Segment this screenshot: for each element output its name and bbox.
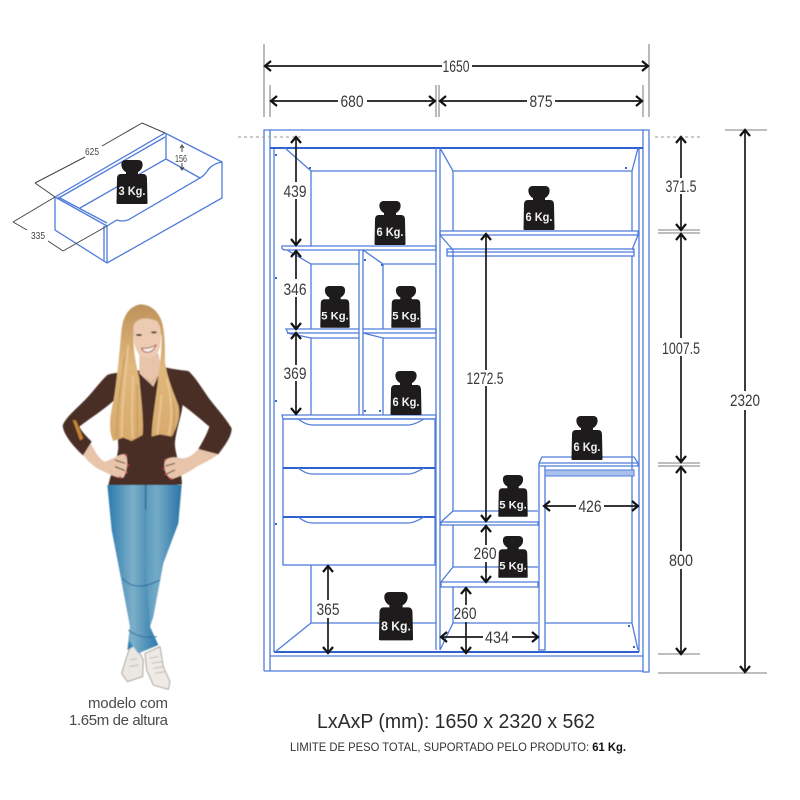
dimension: 369 height: 369 (284, 364, 306, 383)
panel: drawer detail (13, 123, 222, 263)
weight: 5 Kg left niche: 5 Kg. (321, 310, 349, 322)
hair, face, sweater and arms (63, 304, 232, 487)
dimension: right side heights (658, 130, 767, 673)
drawer label: 156: 156 (175, 153, 187, 165)
weight: 5 Kg shelf: 5 Kg. (499, 499, 527, 511)
dimension: 260 lower: 260 (454, 604, 476, 623)
dimension: 371.5 (666, 137, 696, 230)
weight: 3 Kg (116, 160, 148, 204)
weight: 3 Kg: 3 Kg. (118, 186, 146, 198)
figure: model (63, 304, 232, 689)
dimension: 426 width (544, 497, 638, 516)
weight: 6 Kg right shelf: 6 Kg. (574, 442, 600, 454)
weight: 6 Kg upper right shelf (524, 186, 554, 230)
dimension: 1272.5 height: 1272.5 (466, 369, 504, 388)
dimension: 1007.5: 1007.5 (662, 339, 700, 358)
weight: 5 Kg right niche: 5 Kg. (392, 310, 420, 322)
note: weight limit: LIMITE DE PESO TOTAL, SUPORTADO PELO PRODUTO: 61 Kg. (290, 742, 626, 754)
right compartment (440, 148, 638, 650)
dimension: 260 lower (454, 588, 476, 653)
panel: wardrobe drawing (264, 130, 649, 672)
jeans and shoes (107, 485, 182, 689)
dimension: 346 height (284, 251, 306, 329)
weight: 8 Kg floor: 8 Kg. (381, 620, 411, 634)
drawer outline (55, 133, 222, 263)
dimension: 426 width: 426 (578, 497, 602, 516)
dimension: 260 upper: 260 (474, 544, 496, 563)
dotted reference lines (238, 136, 702, 138)
dimension: 439 height (284, 137, 306, 245)
dimension: 369 height (284, 333, 306, 414)
weight: 6 Kg upper right shelf: 6 Kg. (526, 212, 552, 224)
dimension: 371.5: 371.5 (666, 177, 696, 196)
dimension: 875 width: 875 (530, 92, 552, 111)
weight: 8 Kg floor (379, 592, 413, 640)
weight: 6 Kg above drawers (390, 371, 422, 415)
dimension: 2320: 2320 (730, 391, 760, 410)
dimension: 439 height: 439 (284, 182, 306, 201)
weight: 6 Kg right shelf (572, 416, 602, 460)
weight: 6 Kg above drawers: 6 Kg. (392, 397, 420, 409)
weight: 5 Kg left niche (320, 286, 350, 328)
dimension: 1650 width (264, 44, 649, 117)
weight: 5 Kg lower shelf: 5 Kg. (499, 560, 527, 572)
dimension: 260 upper (474, 526, 496, 582)
dimension: 434 width: 434 (485, 628, 509, 647)
caption: model height: modelo com (88, 695, 168, 712)
dimension: 346 height: 346 (284, 280, 306, 299)
dimension: 434 width (441, 628, 538, 647)
dimension: 365 height: 365 (316, 600, 340, 619)
dimension: 800: 800 (669, 551, 693, 570)
caption: model height: 1.65m de altura (69, 712, 169, 729)
caption: model height (69, 695, 169, 729)
dimension: 680 width: 680 (340, 92, 364, 111)
drawer label: 335: 335 (31, 230, 45, 242)
weight: 5 Kg lower shelf (498, 536, 528, 578)
three drawers (282, 415, 436, 565)
left compartment (275, 148, 440, 652)
weight: 6 Kg upper left shelf: 6 Kg. (376, 227, 404, 239)
drawer dimension lines (13, 123, 184, 251)
dimension: 875 width (439, 85, 643, 117)
title: product dimensions: LxAxP (mm): 1650 x 2320 x 562 (317, 711, 595, 733)
weight: 6 Kg upper left shelf (374, 201, 406, 245)
drawer label: 625: 625 (85, 146, 99, 158)
wardrobe outer frame and top panel (264, 130, 649, 672)
dimension: 680 width (270, 85, 436, 117)
weight: 5 Kg right niche (391, 286, 421, 328)
dimension: 365 height (316, 566, 340, 653)
dimension: 1650 width: 1650 (442, 57, 470, 76)
weight: 5 Kg shelf (498, 475, 528, 517)
